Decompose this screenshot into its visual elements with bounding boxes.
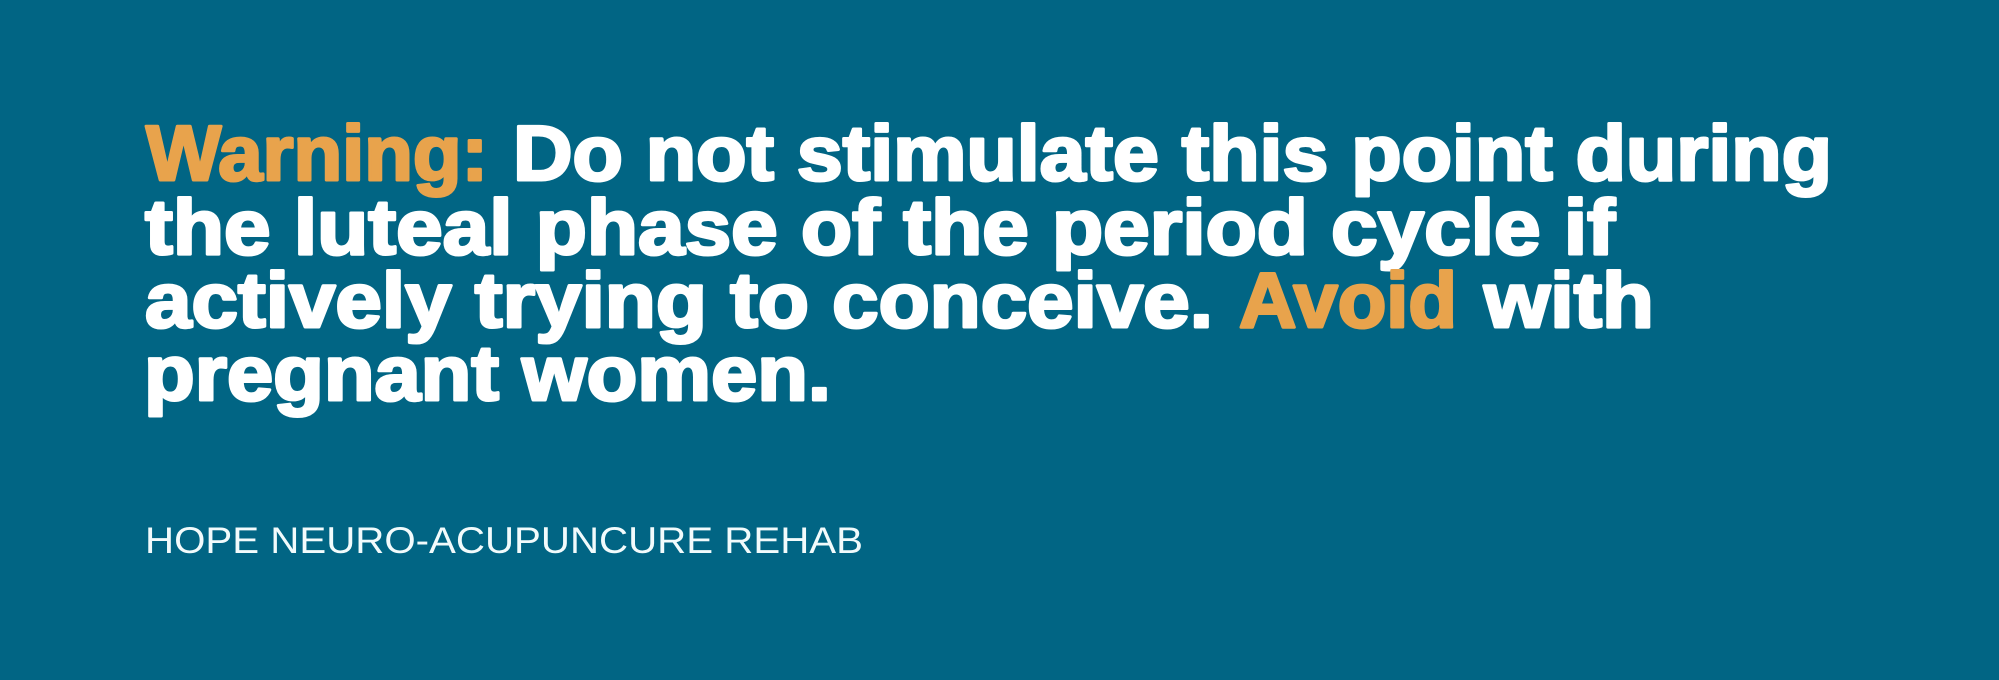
line 2 text: the luteal phase of the period cycle if (145, 183, 1616, 271)
line 3 text: actively trying to conceive. (145, 256, 1213, 344)
highlighted word: Avoid: Avoid (1239, 256, 1457, 344)
footer organisation name: HOPE NEURO-ACUPUNCURE REHAB (145, 520, 863, 561)
line 1 text: Do not stimulate this point during (513, 109, 1832, 197)
line 4 text: pregnant women. (144, 329, 831, 417)
line 3 ending: with (1483, 256, 1654, 344)
warning statement heading (144, 109, 1832, 417)
highlighted word: Warning: Warning: (146, 109, 488, 197)
